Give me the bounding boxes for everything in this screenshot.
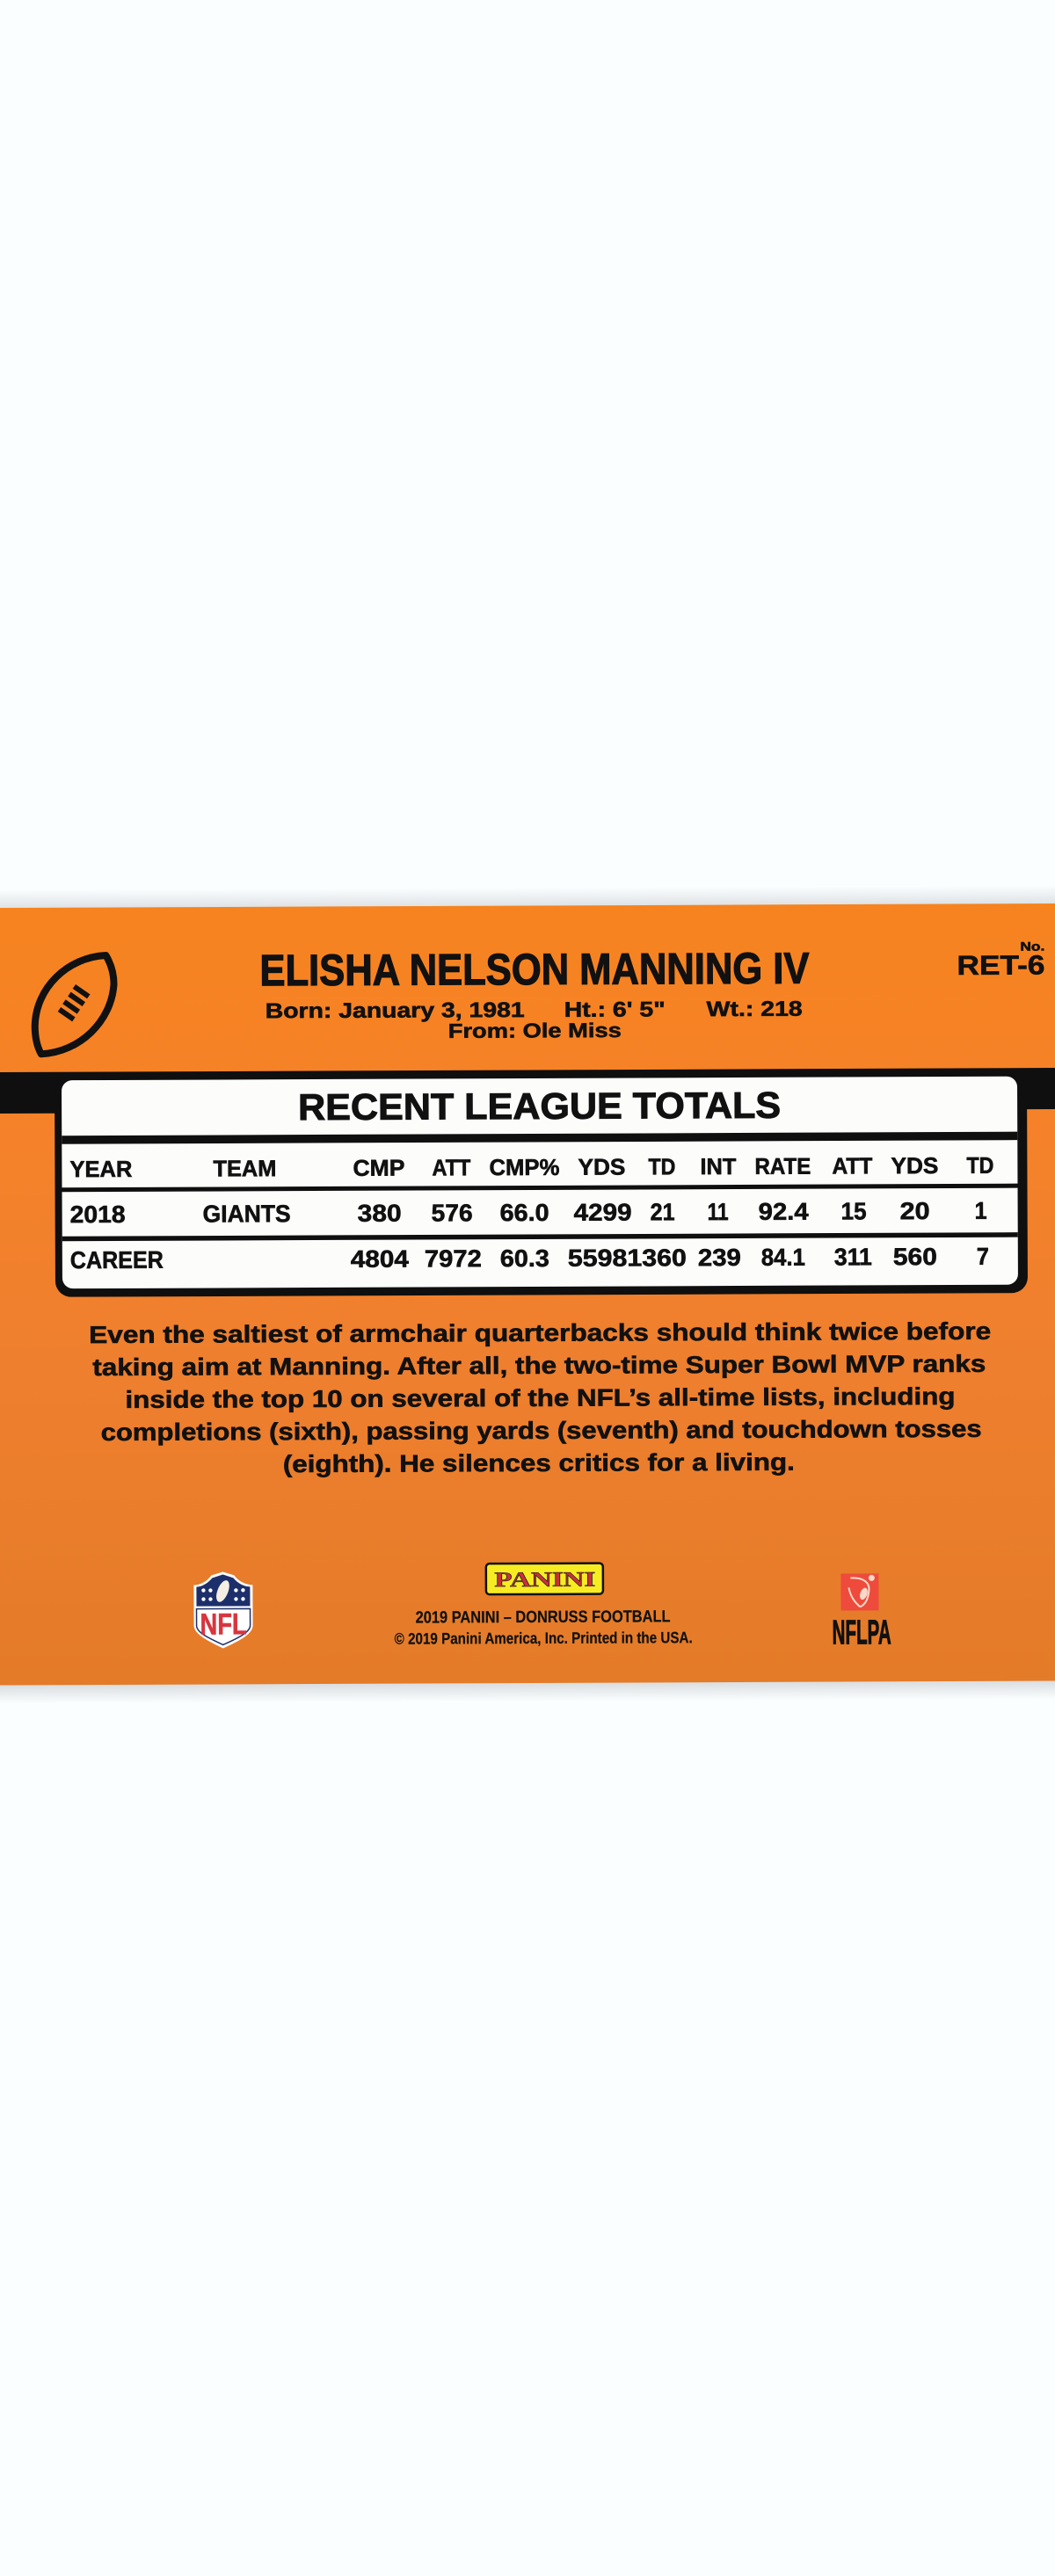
icon: football (34, 955, 114, 1054)
player bio: Wt.: 218 (707, 998, 803, 1021)
table row: 2018: 4299 (574, 1199, 632, 1226)
table row: career (70, 1243, 989, 1273)
player bio: Ht.: 6' 5" (564, 998, 666, 1022)
table heading: RECENT LEAGUE TOTALS (298, 1085, 781, 1128)
table row: 2018: 576 (432, 1199, 473, 1226)
table header row: TD (966, 1152, 993, 1179)
table row: career: 7 (977, 1243, 989, 1270)
logo: NFLPA (832, 1573, 891, 1652)
table header row: RATE (754, 1153, 811, 1179)
table header row: INT (700, 1153, 737, 1179)
table row: 2018: 1 (975, 1197, 987, 1224)
table row: career: 311 (834, 1243, 872, 1271)
player bio: From: Ole Miss (448, 1019, 622, 1042)
table row: 2018: 2018 (70, 1201, 126, 1228)
career summary text: taking aim at Manning. After all, the two-time Super Bowl MVP ranks (92, 1350, 986, 1381)
logo: Panini: PANINI (494, 1569, 595, 1592)
card number: RET-6 (957, 950, 1045, 981)
logo: NFLPA: NFLPA (833, 1614, 891, 1652)
logo: NFL shield: NFL (200, 1607, 247, 1642)
table row: 2018: 11 (708, 1198, 729, 1225)
table row: career: 60.3 (500, 1244, 549, 1272)
table row: career: 4804 (351, 1245, 410, 1273)
table header row: ATT (832, 1152, 873, 1179)
copyright text (395, 1607, 693, 1648)
table header row: YDS (891, 1152, 938, 1179)
table row: 2018: 15 (841, 1197, 867, 1225)
copyright text: © 2019 Panini America, Inc. Printed in the USA. (395, 1629, 693, 1648)
table row: 2018: 92.4 (759, 1198, 809, 1225)
card number: No. (1020, 940, 1044, 954)
table header row: TD (648, 1153, 675, 1179)
career summary text: inside the top 10 on several of the NFL’s all-time lists, including (125, 1382, 956, 1413)
title: player name: ELISHA NELSON MANNING IV (259, 944, 810, 995)
player bio (266, 998, 803, 1043)
panel: orange card (0, 903, 1055, 1686)
table row: 2018: GIANTS (203, 1200, 291, 1228)
table row: 2018 (70, 1197, 987, 1228)
career summary text: completions (sixth), passing yards (seventh) and touchdown tosses (101, 1415, 982, 1446)
table row: 2018: 380 (358, 1200, 402, 1227)
table row: career: 84.1 (761, 1244, 805, 1271)
table row: career: CAREER (70, 1246, 164, 1273)
logo: NFL shield (193, 1571, 253, 1649)
player bio: Born: January 3, 1981 (266, 998, 525, 1023)
copyright text: 2019 PANINI – DONRUSS FOOTBALL (416, 1607, 671, 1628)
table row: career: 7972 (425, 1244, 482, 1272)
table row: career: 560 (893, 1243, 937, 1270)
career summary text: (eighth). He silences critics for a living. (283, 1448, 795, 1477)
table row: 2018: 66.0 (500, 1199, 549, 1226)
black band (0, 1068, 1055, 1114)
table row: 2018: 21 (651, 1198, 675, 1225)
career summary text: Even the saltiest of armchair quarterbacks should think twice before (89, 1317, 991, 1348)
table header row: YDS (578, 1154, 625, 1180)
logo: Panini (486, 1564, 603, 1594)
table header row: YEAR (69, 1156, 133, 1182)
career summary text (89, 1317, 992, 1478)
table row: career: 55981360 (568, 1244, 687, 1272)
table header row: TEAM (213, 1155, 276, 1181)
table row: 2018: 20 (900, 1197, 930, 1224)
table header row: ATT (432, 1154, 471, 1180)
table row: career: 239 (698, 1244, 741, 1271)
card number (957, 940, 1045, 981)
table header row: CMP% (489, 1154, 559, 1180)
table header row (69, 1152, 993, 1182)
table header row: CMP (353, 1155, 404, 1181)
panel: stats table (55, 1075, 1028, 1297)
